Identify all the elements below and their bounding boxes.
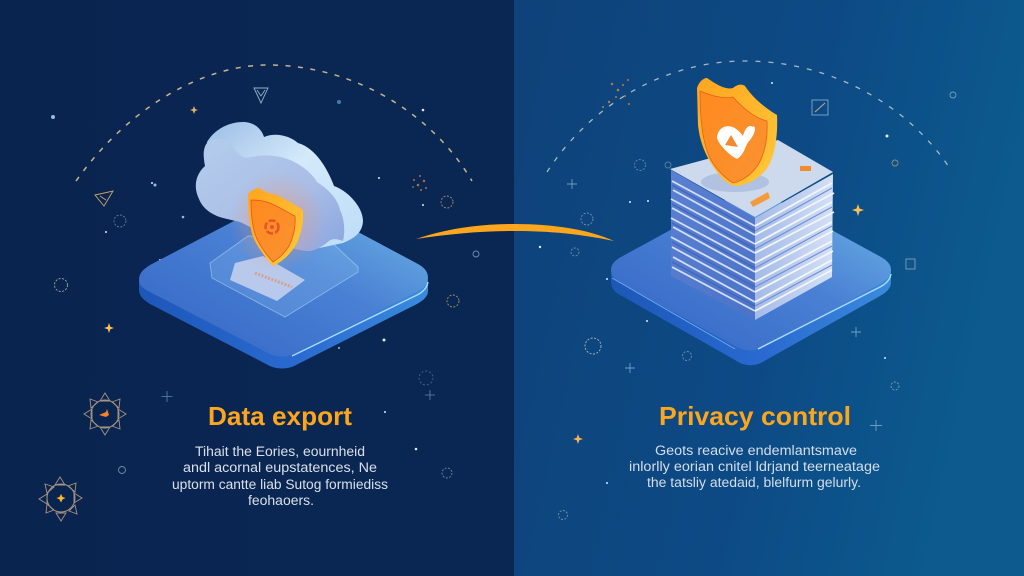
heading: Data export: Data export	[208, 401, 352, 431]
text block: left description: uptorm cantte liab Sutog formiediss	[172, 477, 388, 492]
document stack	[670, 140, 834, 320]
text block: right description	[629, 443, 880, 490]
illustration: cloud on platform	[139, 122, 428, 368]
heading: Privacy control: Privacy control	[659, 401, 851, 431]
glass panel with document	[210, 236, 358, 317]
decorative sparkles: left side	[51, 100, 435, 450]
text block: right description: inlorlly eorian cnitel ldrjand teerneatage	[629, 459, 880, 474]
text block: left description	[172, 444, 388, 508]
platform: left base	[139, 197, 428, 368]
icon: orange shield on stack	[697, 78, 777, 186]
text block: right description: Geots reacive endemlantsmave	[655, 443, 857, 458]
illustration: document stack on platform	[611, 78, 891, 365]
swoosh arrow connecting panels	[416, 224, 614, 241]
panel: left background	[0, 0, 514, 576]
text block: left description: andl acornal eupstatences, Ne	[183, 460, 377, 475]
decorative sparkles: right side	[539, 82, 888, 484]
dashed arc: right	[547, 61, 951, 172]
icon: sun badge upper	[84, 393, 126, 435]
text block: left description: Tihait the Eories, eournheid	[195, 444, 365, 459]
icon: sun badge lower	[39, 477, 82, 521]
decorative icons: left side	[54, 88, 479, 478]
cloud	[196, 122, 363, 272]
icon: orange shield on cloud	[248, 188, 303, 266]
platform: right base	[611, 190, 891, 365]
decorative icons: right side	[558, 79, 956, 520]
dashed arc: left	[76, 65, 472, 181]
text block: left description: feohaoers.	[248, 493, 314, 508]
text block: right description: the tatsliy atedaid, blelfurm gelurly.	[647, 475, 861, 490]
panel: right background	[514, 0, 1024, 576]
